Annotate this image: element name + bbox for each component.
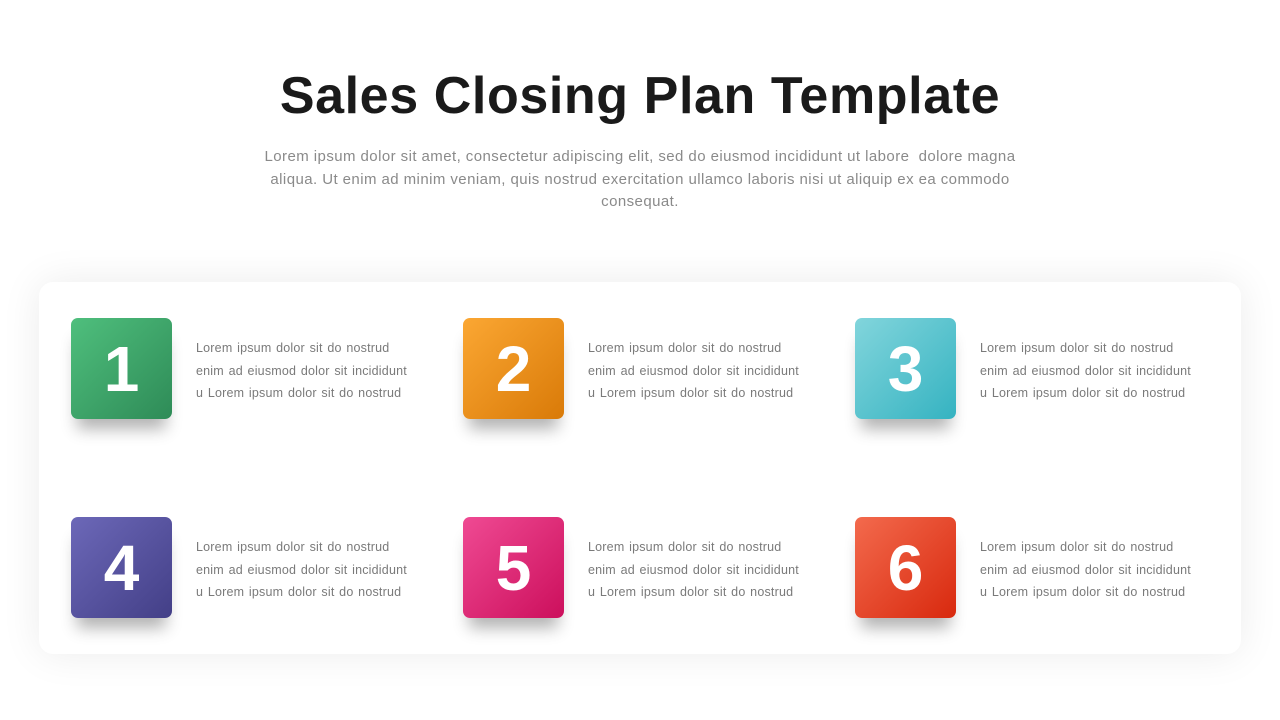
step 2: enim ad eiusmod dolor sit incididunt — [588, 364, 799, 378]
step 1: u Lorem ipsum dolor sit do nostrud — [196, 386, 401, 400]
step 4: 4 — [104, 532, 139, 604]
step 3: Lorem ipsum dolor sit do nostrud — [980, 341, 1173, 355]
step 2: 2 — [496, 333, 531, 405]
step 5: u Lorem ipsum dolor sit do nostrud — [588, 585, 793, 599]
step 1: Lorem ipsum dolor sit do nostrud — [196, 341, 389, 355]
step 5 — [460, 517, 799, 638]
step 1: enim ad eiusmod dolor sit incididunt — [196, 364, 407, 378]
step 4: Lorem ipsum dolor sit do nostrud — [196, 540, 389, 554]
step 5: enim ad eiusmod dolor sit incididunt — [588, 562, 799, 576]
step 1 — [68, 318, 407, 438]
step 4: u Lorem ipsum dolor sit do nostrud — [196, 585, 401, 599]
step 6: 6 — [888, 532, 923, 604]
step 3: 3 — [888, 333, 923, 405]
panel: steps — [39, 282, 1241, 654]
step 2: u Lorem ipsum dolor sit do nostrud — [588, 386, 793, 400]
step 5: Lorem ipsum dolor sit do nostrud — [588, 540, 781, 554]
subtitle — [265, 148, 1016, 210]
subtitle: aliqua. Ut enim ad minim veniam, quis nostrud exercitation ullamco laboris nisi ut aliquip ex ea commodo — [270, 170, 1010, 188]
title: Sales Closing Plan Template — [280, 67, 1000, 125]
step 2: Lorem ipsum dolor sit do nostrud — [588, 341, 781, 355]
step 6 — [852, 517, 1191, 638]
step 3: enim ad eiusmod dolor sit incididunt — [980, 364, 1191, 378]
subtitle: Lorem ipsum dolor sit amet, consectetur adipiscing elit, sed do eiusmod incididunt ut labore dolore magna — [265, 148, 1015, 165]
step 4: enim ad eiusmod dolor sit incididunt — [196, 562, 407, 576]
step 3: u Lorem ipsum dolor sit do nostrud — [980, 386, 1185, 400]
step 3 — [852, 318, 1191, 438]
step 6: u Lorem ipsum dolor sit do nostrud — [980, 585, 1185, 599]
step 4 — [68, 517, 407, 638]
step 5: 5 — [496, 532, 531, 604]
step 2 — [460, 318, 799, 438]
step 1: 1 — [104, 333, 139, 405]
step 6: enim ad eiusmod dolor sit incididunt — [980, 562, 1191, 576]
step 6: Lorem ipsum dolor sit do nostrud — [980, 540, 1173, 554]
subtitle: consequat. — [601, 193, 679, 210]
